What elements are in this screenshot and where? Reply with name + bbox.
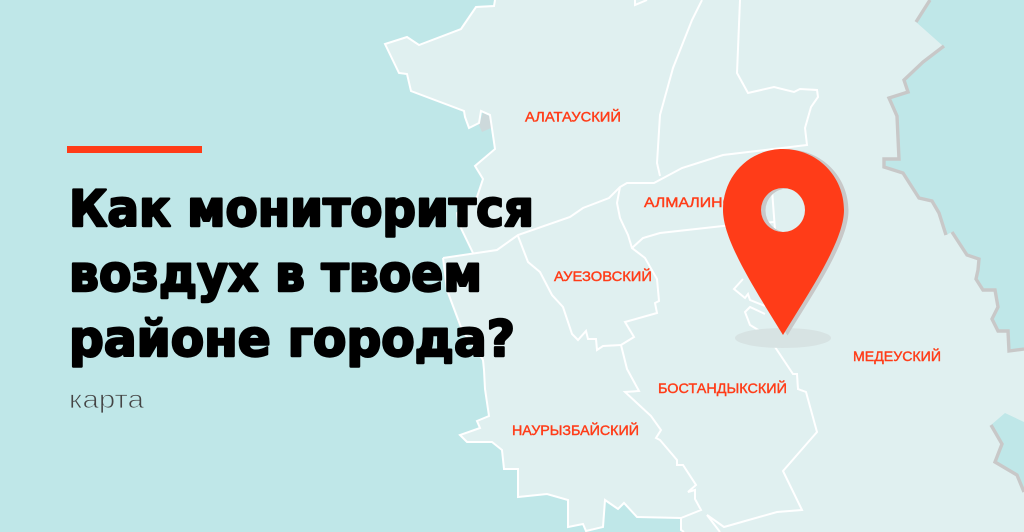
label: Алатауский: АЛАТАУСКИЙ [525, 110, 621, 124]
title: Как мониторится [69, 180, 534, 238]
map land area [385, 0, 1024, 532]
right teal areas [883, 0, 1024, 492]
label: Наурызбайский: НАУРЫЗБАЙСКИЙ [512, 423, 639, 438]
pin body [723, 149, 844, 335]
subtitle: карта [69, 386, 144, 414]
pin ground shadow [735, 328, 831, 348]
title: воздух в твоем [69, 245, 482, 303]
district borders [385, 0, 818, 532]
icon: map pin [723, 149, 848, 348]
label: Бостандыкский: БОСТАНДЫКСКИЙ [658, 381, 787, 396]
grey right border [884, 0, 1024, 492]
label: Алмалинский: АЛМАЛИНСКИЙ [644, 195, 766, 210]
title [69, 180, 534, 368]
small grey patch [479, 113, 491, 132]
label: Ауэзовский: АУЕЗОВСКИЙ [554, 269, 652, 284]
pin grey shadow [728, 150, 848, 336]
label: Медеуский: МЕДЕУСКИЙ [853, 349, 941, 364]
district labels [512, 110, 941, 438]
city map [385, 0, 1024, 532]
title: районе города? [69, 310, 515, 368]
accent bar [67, 146, 202, 153]
